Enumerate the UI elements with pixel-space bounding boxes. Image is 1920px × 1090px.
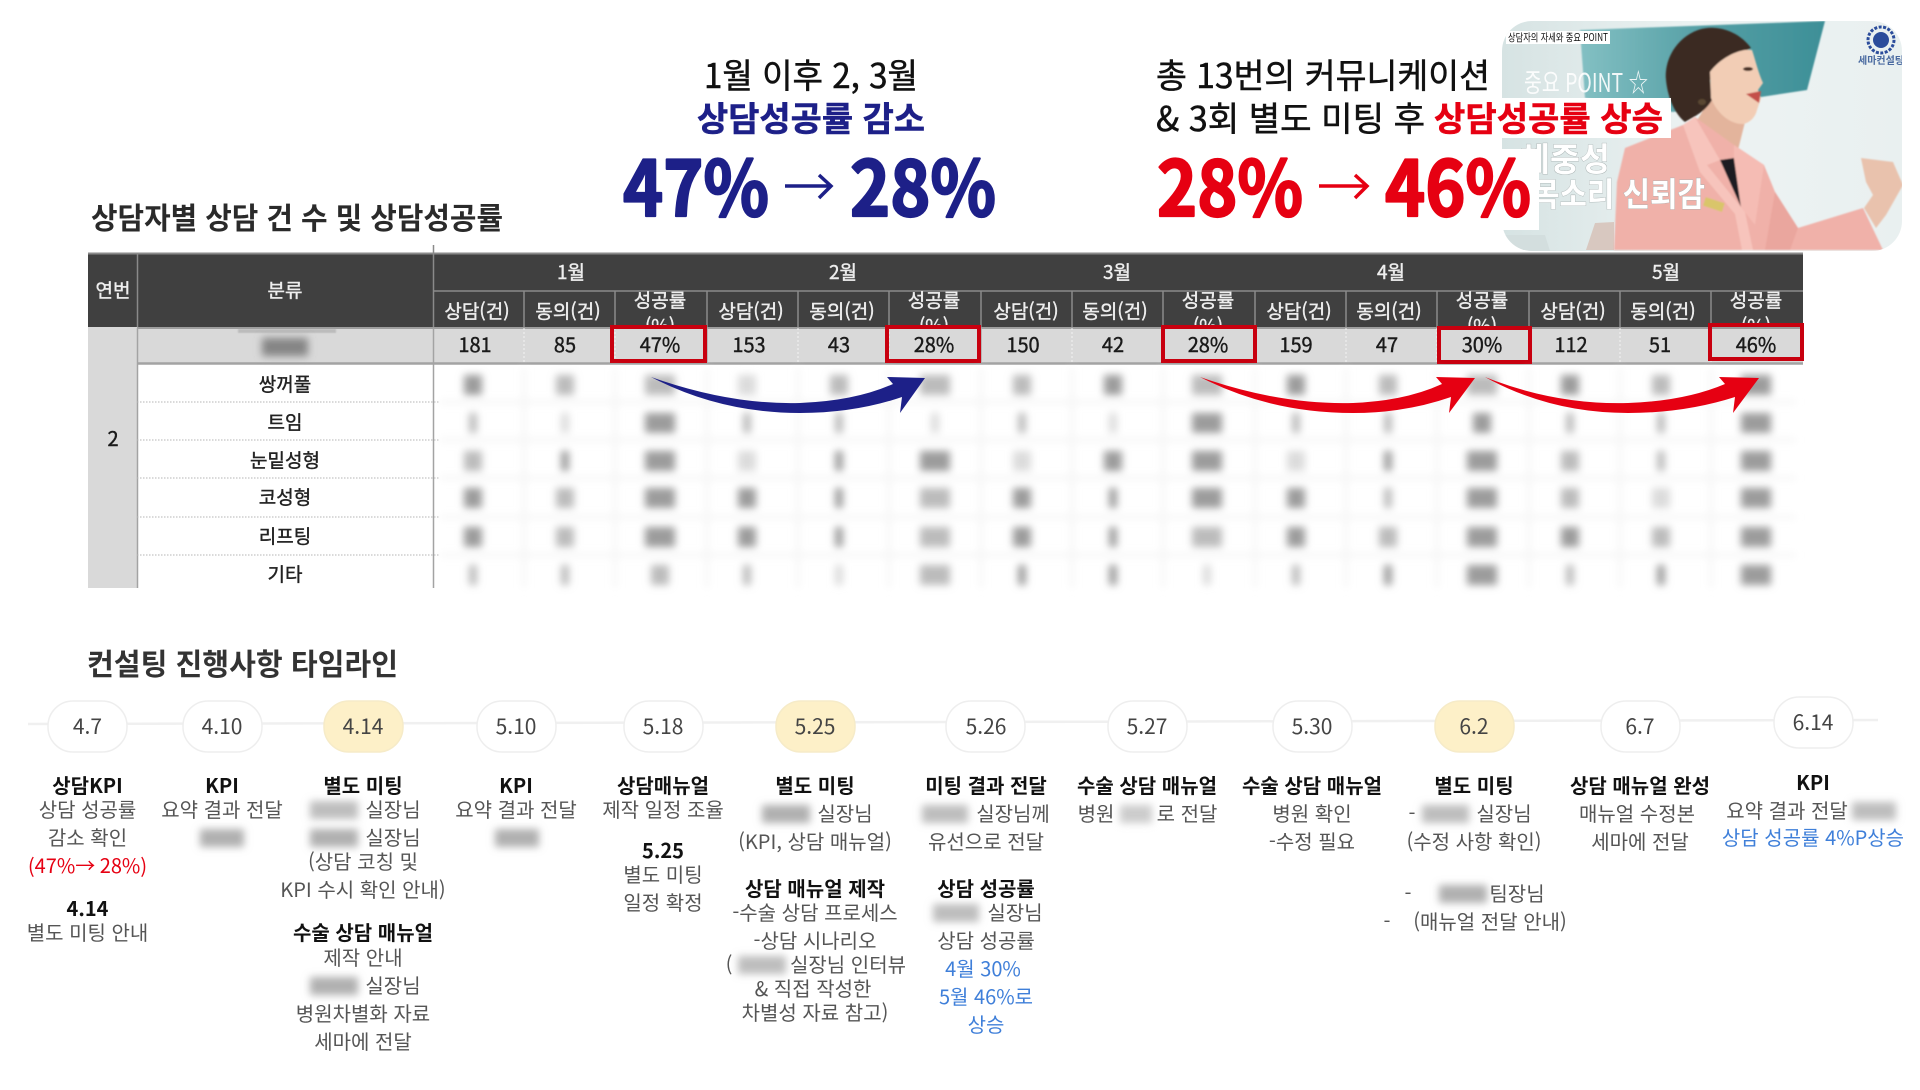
row labels: 트임 (268, 408, 302, 435)
group column: 2 (88, 327, 137, 588)
timeline item: 5.27: 로 전달 (1157, 798, 1217, 827)
timeline item: 4.7 (27, 770, 148, 946)
timeline item: 5.30: 수술 상담 매뉴얼 (1242, 770, 1382, 799)
timeline item: 6.2: 팀장님 (1489, 878, 1545, 907)
timeline item: 6.14: KPI (1796, 767, 1830, 796)
summary row: 181 (458, 329, 492, 358)
timeline dates: 6.14 (1793, 707, 1833, 737)
timeline item: 5.25: 실장님 (817, 798, 873, 827)
headline: decrease (623, 49, 996, 238)
timeline item: 4.14: 별도 미팅 (323, 770, 403, 799)
timeline item: 5.25: 실장님 인터뷰 (790, 949, 906, 978)
headline: increase: 상담성공률 상승 (1434, 92, 1663, 141)
arrow: blue decrease (651, 377, 925, 413)
timeline dates: 5.26 (966, 711, 1006, 741)
timeline item: 5.18: 제작 일정 조율 (602, 794, 724, 823)
timeline item: 6.7: 상담 매뉴얼 완성 (1570, 770, 1710, 799)
headline: decrease: 28% (850, 128, 996, 238)
timeline item: 6.2: 실장님 (1476, 798, 1532, 827)
headline: decrease: 1월 이후 2, 3월 (704, 49, 918, 98)
photo overlay text: 중요 POINT ☆ (1524, 63, 1648, 100)
timeline item: 4.7: 감소 확인 (48, 822, 127, 851)
timeline item: 6.7: 매뉴얼 수정본 (1579, 798, 1695, 827)
timeline item: 4.14: KPI 수시 확인 안내) (280, 874, 446, 903)
timeline item: 4.14: 세마에 전달 (314, 1026, 412, 1055)
timeline item: 5.10: KPI (499, 770, 533, 799)
table header: 상담(건) (993, 297, 1059, 324)
summary row: 112 (1554, 329, 1588, 358)
timeline item: 5.26: 실장님 (987, 897, 1043, 926)
photo overlay text: 목소리 신뢰감 (1532, 168, 1705, 216)
summary row: 28% (914, 329, 954, 358)
row labels: 쌍꺼풀 (259, 370, 311, 397)
summary row: 47 (1376, 329, 1398, 358)
headline: increase: 28% (1157, 128, 1303, 238)
timeline item: 5.27: 수술 상담 매뉴얼 (1077, 770, 1217, 799)
summary row: 30% (1462, 329, 1502, 358)
timeline item: 5.26: 미팅 결과 전달 (925, 770, 1047, 799)
timeline item: 5.25: 별도 미팅 (775, 770, 855, 799)
timeline item: 6.14 (1722, 767, 1904, 851)
timeline item: 5.30: 병원 확인 (1272, 798, 1352, 827)
headline: increase: & 3회 별도 미팅 후 (1156, 92, 1425, 141)
timeline item: 4.7: 별도 미팅 안내 (27, 917, 148, 946)
table header: 성공률 (1730, 286, 1782, 313)
table header: 성공률 (634, 286, 686, 313)
timeline item: 5.25: ( (726, 949, 732, 978)
timeline item: 4.14: 수술 상담 매뉴얼 (293, 917, 433, 946)
headline: increase: 총 13번의 커뮤니케이션 (1156, 49, 1490, 98)
table header: 상담(건) (1540, 297, 1606, 324)
timeline dates: 6.2 (1459, 711, 1489, 741)
table header: 2월 (829, 258, 857, 285)
timeline item: 6.7: 세마에 전달 (1591, 826, 1689, 855)
table header: 동의(건) (1356, 297, 1422, 324)
headline: increase: 46% (1385, 128, 1531, 238)
table header: (%) (1193, 312, 1223, 339)
timeline dates: 4.10 (202, 711, 242, 741)
timeline item: 4.10: KPI (205, 770, 239, 799)
timeline item: 6.2: (매뉴얼 전달 안내) (1413, 906, 1567, 935)
timeline item: 5.25: 상담 매뉴얼 제작 (745, 873, 885, 902)
summary row: 153 (732, 329, 766, 358)
row labels: 기타 (268, 560, 302, 587)
white backing behind headline (1502, 98, 1671, 230)
timeline dates: 4.7 (73, 711, 102, 741)
timeline item: 5.26: 상담 성공률 (937, 925, 1035, 954)
timeline item: 4.7: 4.14 (67, 893, 109, 922)
headline: increase (1156, 49, 1663, 238)
headline: decrease: 상담성공률 감소 (697, 92, 925, 141)
timeline item: 5.25: & 직접 작성한 (755, 973, 871, 1002)
row labels: 눈밑성형 (250, 446, 320, 473)
photo overlay text: 체중성 (1520, 133, 1610, 181)
timeline item: 5.26: 상담 성공률 (937, 873, 1035, 902)
table header: 분류 (268, 276, 302, 303)
table header: 3월 (1103, 258, 1131, 285)
table header: (%) (1741, 312, 1771, 339)
timeline item: 5.26: 상승 (968, 1009, 1004, 1038)
timeline item: 6.2: 별도 미팅 (1434, 770, 1514, 799)
timeline item: 5.27: 병원 (1078, 798, 1114, 827)
timeline item: 5.30: -수정 필요 (1269, 826, 1355, 855)
timeline item: 4.14: (상담 코칭 및 (308, 846, 418, 875)
table header: 동의(건) (535, 297, 601, 324)
timeline dates: 5.10 (496, 711, 536, 741)
timeline dates: 6.7 (1625, 711, 1655, 741)
table header: (%) (1467, 312, 1497, 339)
row labels (137, 363, 440, 588)
timeline dates: 5.27 (1127, 711, 1167, 741)
timeline item: 4.14 (280, 770, 446, 1055)
timeline item: 6.14: 요약 결과 전달 (1726, 795, 1848, 824)
section title: table: 상담자별 상담 건 수 및 상담성공률 (91, 194, 503, 238)
group column: 2: 2 (107, 423, 119, 452)
timeline item: 6.2: - (1409, 798, 1416, 827)
summary row: 47% (640, 329, 680, 358)
photo caption label (1506, 31, 1610, 44)
summary row: 42 (1102, 329, 1124, 358)
row labels: 코성형 (259, 483, 311, 510)
summary row: 85 (554, 329, 576, 358)
table header: (%) (645, 312, 675, 339)
timeline item: 4.14: 실장님 (365, 794, 421, 823)
table header: 동의(건) (1082, 297, 1148, 324)
table header: 동의(건) (809, 297, 875, 324)
summary row: 51 (1649, 329, 1671, 358)
timeline dates: 5.30 (1292, 711, 1332, 741)
table header: 성공률 (1456, 286, 1508, 313)
table header: 1월 (557, 258, 585, 285)
timeline item: 4.7: (47%→ 28%) (28, 850, 147, 879)
timeline item: 5.26: 유선으로 전달 (928, 826, 1044, 855)
timeline item: 4.14: 제작 안내 (323, 942, 403, 971)
timeline item: 5.26 (922, 770, 1050, 1038)
summary row: 46% (1736, 329, 1776, 358)
timeline item: 4.14: 실장님 (365, 822, 421, 851)
blurred table values (440, 368, 1796, 588)
arrow: red increase 2 (1485, 377, 1759, 413)
table header: 성공률 (1182, 286, 1234, 313)
photo: consultant speaking (1502, 21, 1904, 251)
photo overlay text (1520, 63, 1705, 216)
headline: decrease: 47% (623, 128, 769, 238)
timeline item: 5.18: 별도 미팅 (623, 859, 703, 888)
table header: 상담(건) (444, 297, 510, 324)
arrow: red increase 1 (1200, 377, 1475, 413)
timeline item: 5.27 (1077, 770, 1217, 827)
timeline item: 4.10: 요약 결과 전달 (161, 794, 283, 823)
table header: 성공률 (908, 286, 960, 313)
table header: 5월 (1652, 258, 1680, 285)
timeline item: 5.25: -상담 시나리오 (754, 925, 876, 954)
timeline item: 5.26: 4월 30% (945, 953, 1021, 982)
logo: 세마컨설팅 (1858, 27, 1904, 67)
section title: timeline: 컨설팅 진행사항 타임라인 (87, 640, 398, 684)
timeline item: 5.18 (602, 770, 724, 916)
table: consultations and success rate by month (88, 245, 1803, 588)
timeline dates: 5.18 (643, 711, 683, 741)
timeline item: 6.2: - (1384, 906, 1391, 935)
table header: 연번 (96, 276, 130, 303)
table header: 상담(건) (718, 297, 784, 324)
table header (88, 245, 1803, 339)
timeline item: 6.2 (1384, 770, 1567, 935)
timeline item: 5.25: (KPI, 상담 매뉴얼) (738, 826, 892, 855)
timeline item: 4.10 (161, 770, 283, 847)
table header: 상담(건) (1266, 297, 1332, 324)
timeline item: 4.7: 상담KPI (52, 770, 123, 799)
table header: (%) (919, 312, 949, 339)
timeline dates: 5.25 (795, 711, 835, 741)
timeline item: 5.18: 상담매뉴얼 (617, 770, 709, 799)
timeline item: 5.25: -수술 상담 프로세스 (732, 897, 898, 926)
timeline item: 4.7: 상담 성공률 (39, 794, 136, 823)
table header: 동의(건) (1630, 297, 1696, 324)
summary row: 43 (828, 329, 850, 358)
timeline item: 5.25 (726, 770, 906, 1026)
row labels: 리프팅 (259, 522, 311, 549)
timeline item: 6.2: - (1405, 878, 1412, 907)
timeline item: 5.18: 일정 확정 (623, 887, 703, 916)
timeline item: 5.18: 5.25 (642, 835, 684, 864)
summary row: 28% (1188, 329, 1228, 358)
timeline item: 5.10 (455, 770, 577, 847)
summary row: 159 (1279, 329, 1313, 358)
summary row: 150 (1006, 329, 1040, 358)
timeline item: 5.25: 차별성 자료 참고) (742, 997, 888, 1026)
table header: 4월 (1377, 258, 1405, 285)
timeline item: 5.26: 실장님께 (976, 798, 1050, 827)
timeline dates: 4.14 (343, 711, 383, 741)
highlight boxes (612, 325, 1802, 362)
timeline item: 6.14: 상담 성공률 4%P상승 (1722, 822, 1904, 851)
logo: 세마컨설팅: 세마컨설팅 (1858, 52, 1904, 67)
timeline item: 5.10: 요약 결과 전달 (455, 794, 577, 823)
timeline item: 6.7 (1570, 770, 1710, 855)
timeline item: 5.26: 5월 46%로 (939, 981, 1033, 1010)
timeline item: 6.2: (수정 사항 확인) (1406, 826, 1542, 855)
photo caption label: 상담자의 자세와 중요 POINT (1508, 30, 1608, 45)
timeline item: 4.14: 병원차별화 자료 (296, 998, 430, 1027)
summary row (137, 327, 1803, 364)
timeline item: 5.30 (1242, 770, 1382, 855)
timeline dates (28, 697, 1878, 752)
timeline item: 4.14: 실장님 (365, 970, 421, 999)
